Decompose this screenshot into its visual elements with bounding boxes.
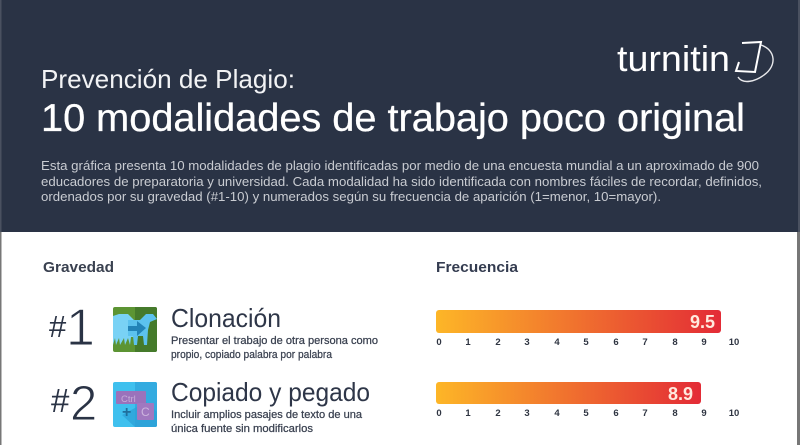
description: Copiado y pegado — [171, 409, 363, 435]
description: Clonación: propio, copiado palabra por palabra — [171, 349, 333, 361]
title: main: 10 modalidades de trabajo poco original — [41, 97, 745, 140]
bar chart: Copiado y pegado frequency: 9 — [701, 408, 707, 419]
bar chart: Copiado y pegado frequency: 7 — [642, 408, 648, 419]
heading: Gravedad: Gravedad — [43, 259, 114, 276]
bar chart: Clonación frequency: 6 — [613, 337, 619, 348]
icon: sheep clone — [113, 307, 157, 352]
intro paragraph — [41, 158, 762, 204]
bar chart: Clonación frequency: 8 — [672, 337, 678, 348]
bar chart: Clonación frequency: 3 — [524, 337, 530, 348]
bar chart: Copiado y pegado frequency: 8 — [672, 408, 678, 419]
bar chart: Copiado y pegado frequency: 8.9 — [668, 384, 693, 404]
bar chart: Clonación frequency: 9 — [701, 337, 707, 348]
icon: ctrl c keys: + — [122, 404, 131, 421]
icon: ctrl c keys: C — [141, 405, 150, 419]
panel: header — [0, 0, 800, 232]
rank #1: 1 — [66, 299, 95, 357]
intro paragraph: ordenados por su gravedad (#1-10) y numerados según su frecuencia de aparición (1=menor, 10=mayor). — [41, 189, 661, 204]
description: Copiado y pegado: única fuente sin modificarlos — [171, 423, 314, 435]
icon: ctrl c keys: Ctrl — [121, 394, 136, 405]
rank #1: # — [49, 309, 67, 344]
bar chart: Clonación frequency: 9.5 — [690, 312, 715, 332]
bar chart: Clonación frequency: 5 — [583, 337, 589, 348]
icon: ctrl c keys — [113, 382, 157, 427]
bar chart: Clonación frequency: 4 — [554, 337, 560, 348]
rank #2 — [51, 377, 97, 431]
description: Clonación — [171, 335, 378, 361]
intro paragraph: educadores de preparatoria y universidad. Cada modalidad ha sido identificada con nombres fáciles de recordar, definidos, — [41, 174, 762, 189]
logo: turnitin — [617, 38, 773, 81]
bar chart: Clonación frequency: 7 — [642, 337, 648, 348]
bar chart: Copiado y pegado frequency: 0 — [436, 408, 442, 419]
description: Copiado y pegado: Incluir amplios pasajes de texto de una — [171, 409, 363, 421]
logo: turnitin: turnitin — [617, 38, 730, 79]
bar chart: Copiado y pegado frequency: 4 — [554, 408, 560, 419]
intro paragraph: Esta gráfica presenta 10 modalidades de plagio identificadas por medio de una encuesta mundial a un aproximado de 900 — [41, 158, 759, 173]
bar chart: Copiado y pegado frequency: 1 — [465, 408, 471, 419]
rank #2: # — [51, 382, 70, 419]
rank #2: 2 — [70, 377, 97, 431]
bar chart: Clonación frequency: 0 — [436, 337, 442, 348]
bar chart: Copiado y pegado frequency — [436, 382, 739, 419]
description: Clonación: Presentar el trabajo de otra persona como — [171, 335, 378, 347]
rank #1 — [49, 299, 95, 357]
bar chart: Copiado y pegado frequency: 5 — [583, 408, 589, 419]
bar chart: Copiado y pegado frequency: 10 — [729, 408, 739, 419]
title: prevention: Prevención de Plagio: — [41, 64, 295, 94]
bar chart: Copiado y pegado frequency: 2 — [495, 408, 501, 419]
name: Copiado y pegado: Copiado y pegado — [171, 377, 370, 407]
bar chart: Copiado y pegado frequency: 6 — [613, 408, 619, 419]
bar chart: Clonación frequency — [436, 310, 739, 348]
heading: Frecuencia: Frecuencia — [436, 259, 519, 276]
bar chart: Copiado y pegado frequency: 3 — [524, 408, 530, 419]
name: Clonación: Clonación — [171, 303, 281, 333]
bar chart: Clonación frequency: 2 — [495, 337, 501, 348]
bar chart: Clonación frequency: 1 — [465, 337, 471, 348]
bar chart: Clonación frequency: 10 — [729, 337, 739, 348]
